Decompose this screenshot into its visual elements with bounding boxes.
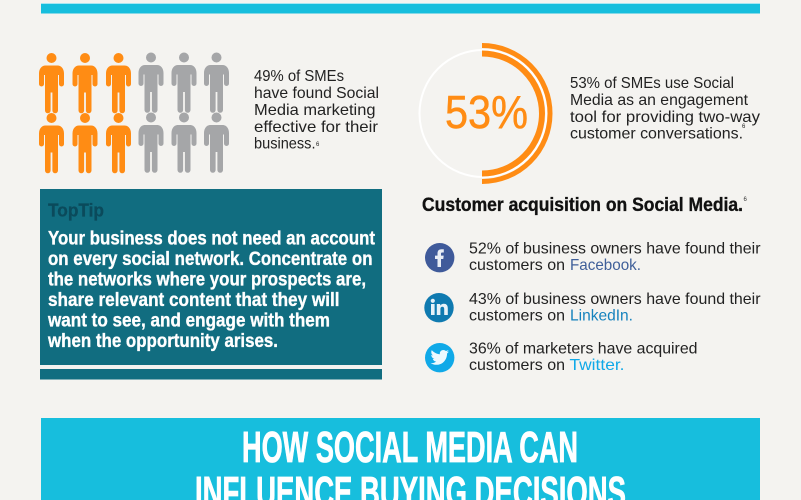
text: 53% of SMEs: tool for providing two-way (570, 109, 760, 126)
text: Twitter stat (469, 340, 698, 374)
text: 49% of SMEs (254, 68, 379, 152)
text: 49% of SMEs: 49% of SMEs (254, 68, 344, 85)
heading: top tip: TopTip (48, 200, 104, 220)
text: LinkedIn stat (469, 291, 761, 324)
text: 53% of SMEs (570, 75, 760, 142)
icon: Facebook (425, 243, 454, 272)
text: Facebook stat (469, 240, 761, 274)
heading: how social media can influence buying decisions (195, 423, 626, 500)
text: 53% of SMEs: customer conversations. (570, 126, 743, 142)
text: LinkedIn stat: customers on (469, 308, 565, 324)
icon: LinkedIn (424, 293, 454, 322)
text: 53% of SMEs: 53% of SMEs use Social (570, 75, 734, 92)
ring chart: 53 percent (420, 46, 550, 182)
text: Twitter stat: 36% of marketers have acquired (469, 340, 698, 358)
text: Twitter stat: Twitter. (570, 357, 624, 374)
text: LinkedIn stat: LinkedIn. (570, 308, 633, 324)
text: 49% of SMEs: 6 (316, 142, 320, 148)
text: Facebook stat: Facebook. (570, 257, 641, 274)
heading: customer acquisition: Customer acquisition on Social Media. (422, 195, 743, 216)
text: 49% of SMEs: effective for their (254, 119, 379, 136)
icon: Twitter (425, 343, 454, 372)
item: Facebook (425, 240, 761, 274)
text: Facebook stat: customers on (469, 257, 565, 274)
panel: top tip (40, 189, 382, 380)
text: LinkedIn stat: 43% of business owners have found their (469, 291, 761, 308)
text: tip body: Your business does not need an account (48, 228, 375, 250)
pictogram: people 49 percent (39, 52, 229, 173)
text: 49% of SMEs: have found Social (254, 85, 379, 102)
text: 53% of SMEs: Media as an engagement (570, 92, 749, 109)
panel: buying decisions banner (41, 418, 760, 500)
text: tip body: share relevant content that they will (48, 289, 340, 311)
top cyan bar (41, 3, 760, 14)
text: tip body: want to see, and engage with them (47, 310, 330, 332)
text: tip body: on every social network. Concentrate on (48, 248, 372, 270)
heading: how social media can influence buying decisions: HOW SOCIAL MEDIA CAN (242, 423, 578, 472)
text: 49% of SMEs: Media marketing (254, 102, 376, 119)
ring chart: 53 percent: 53% (445, 86, 528, 138)
text: tip body: the networks where your prospects are, (48, 268, 366, 290)
heading: customer acquisition: 6 (744, 197, 748, 203)
text: tip body (47, 228, 375, 352)
text: Twitter stat: customers on (469, 357, 565, 374)
item: LinkedIn (424, 291, 761, 324)
text: 49% of SMEs: business. (254, 136, 316, 152)
text: tip body: when the opportunity arises. (47, 330, 278, 352)
text: 53% of SMEs: 6 (742, 124, 746, 130)
text: Facebook stat: 52% of business owners have found their (469, 240, 761, 258)
item: Twitter (425, 340, 698, 374)
